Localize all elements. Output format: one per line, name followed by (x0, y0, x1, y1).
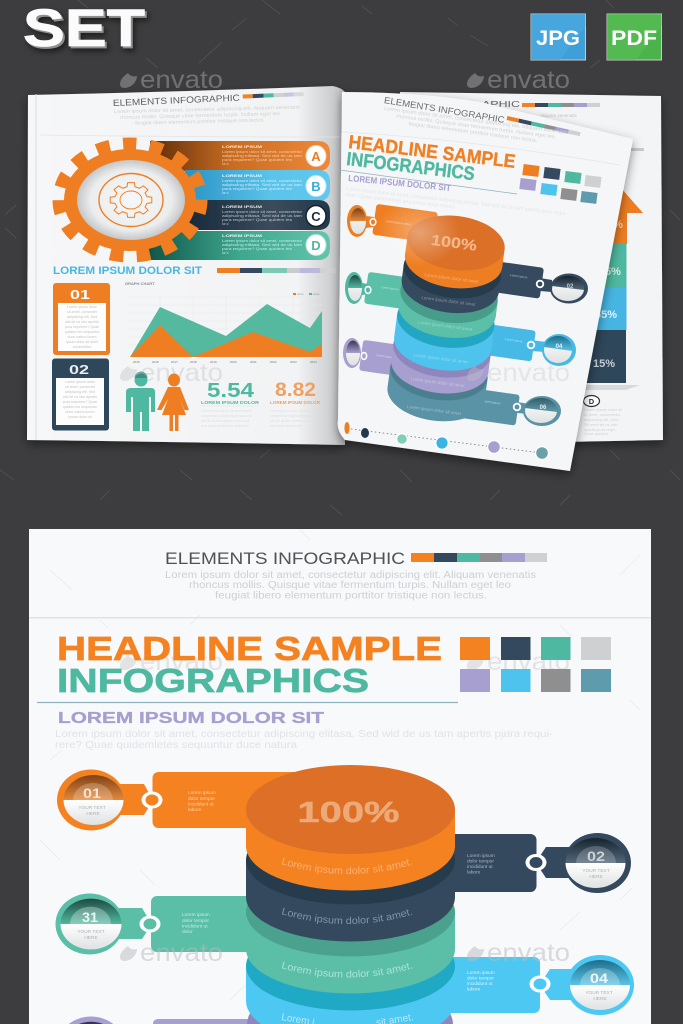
layer: orange (246, 765, 455, 890)
box 01: quidem tes sequuntur (65, 330, 100, 334)
label: 100%: 100% (298, 797, 400, 829)
ribbon B: Lorem ipsum dolor sit amet, consectetur (222, 179, 303, 183)
layer: navy: Lorem ipsum dolor sit amet. (282, 908, 412, 924)
text block: paragraph: rere? Quae quidemletes sequuntur duce natura (345, 192, 455, 210)
badge: JPG (531, 14, 586, 60)
ribbon B (185, 170, 330, 201)
text block: intro: feugiat libero elementum porttitor tristique non lectus. (408, 121, 538, 144)
box 01: adipiscing elit. Sed (67, 315, 97, 319)
tabs right: Lorem ipsum (483, 399, 501, 405)
area chart: 2020 (230, 360, 237, 364)
text block: intro (382, 106, 568, 148)
badge 06: 06 (540, 405, 547, 411)
area chart (125, 281, 322, 364)
area chart: 2018 (190, 360, 197, 364)
watermark: right sheet: envato (487, 359, 570, 387)
text block: D caption: adipiscing elit, dolor (584, 417, 620, 422)
text block: intro (114, 105, 301, 127)
layer: teal (246, 904, 455, 994)
ribbon B: B (311, 179, 321, 194)
box 02: Lorem ipsum dolor (65, 380, 96, 384)
layer: purple (247, 1013, 453, 1024)
ribbon C: LOREM IPSUM (222, 204, 263, 209)
stat: 8.82 (270, 380, 321, 428)
headline: HEADLINE SAMPLE (347, 132, 517, 173)
tabs right: Lorem ipsum (505, 337, 523, 343)
box 01: duce natura lorem (68, 335, 96, 339)
ribbon C: adipiscing elitasa. Sed wid de us tam (222, 214, 303, 218)
tab 03: dolor (182, 929, 193, 935)
area chart: series (313, 293, 320, 296)
icon: man (126, 372, 155, 431)
layer: blue (246, 958, 455, 1024)
ribbon C: pura requirere? Quae quidem tes (222, 218, 293, 222)
tab 02: incididunt ut (467, 864, 493, 870)
heading: elements infographic: ELEMENTS INFOGRAPHIC (383, 95, 506, 125)
box 02: quidem tes sequuntur (63, 405, 98, 409)
stat: 8.82: rere quae quidem tes (270, 424, 302, 428)
subheading: LOREM IPSUM DOLOR SIT (58, 710, 324, 727)
badge 31 (56, 894, 160, 954)
badge 03 (345, 272, 372, 304)
stat: 5.54: wid de us tam apertis pura requi (201, 419, 249, 423)
ribbon A: Lorem ipsum dolor sit amet, consectetur (222, 150, 303, 154)
stat: 8.82: LOREM IPSUM DOLOR (270, 400, 321, 405)
ribbon B: pura requirere? Quae quidem tes (222, 187, 293, 191)
tabs left: Lorem ipsum (381, 285, 399, 291)
box 02 (52, 358, 109, 430)
magazine mockup (27, 86, 663, 471)
chart: arrow column: % (613, 219, 623, 231)
layer: navy (246, 852, 455, 942)
watermark: lower left: envato (140, 939, 223, 967)
text block: paragraph: Lorem ipsum dolor sit amet, consectetur adipiscing elitasa. Sed wid de us tam apertis pura requi- (346, 186, 567, 217)
box 02: ipsum dolor sit (68, 415, 92, 419)
cylinder stack (246, 765, 455, 1024)
box 01: 01 (70, 287, 90, 302)
text block: intro: rhoncus mollis. Quisque vitae fermentum turpis. Nullam eget leo (396, 114, 556, 140)
tab 04: incididunt ut (467, 981, 493, 987)
tab 03 (151, 896, 248, 952)
panel: back right page (400, 92, 663, 442)
badge 01: YOUR TEXT (78, 805, 106, 811)
area chart: series (297, 293, 304, 296)
watermark: headline right (467, 656, 569, 670)
box 02: adipiscing elit. Sed (65, 390, 95, 394)
ribbon D: D (311, 238, 321, 253)
panel: front right sheet (338, 92, 633, 471)
cylinder stack: Lorem ipsum dolor sit amet (407, 404, 462, 416)
chart: arrow column (580, 188, 643, 390)
headline (345, 132, 517, 190)
panel: lower infographic sheet (29, 529, 651, 1024)
watermark: left page: envato (140, 359, 223, 387)
ribbon A: A (311, 149, 321, 164)
text block: D caption: Sit amet de us tam (584, 422, 618, 427)
panel: back right page: Aliquam venenatis (540, 113, 578, 118)
badge 01: HERE (86, 811, 100, 817)
text block: intro: rhoncus mollis. Quisque vitae fermentum turpis. Nullam eget leo (120, 111, 280, 121)
badge 31: 31 (82, 910, 99, 925)
cylinder stack: Lorem ipsum dolor sit amet (421, 295, 476, 307)
watermark: top right: envato (487, 66, 570, 94)
tab 03: incididunt ut (182, 924, 208, 930)
text block: intro: feugiat libero elementum porttitor tristique non lectus. (135, 117, 265, 127)
chart: arrow column: 5% (605, 266, 621, 278)
badge 02: YOUR TEXT (582, 868, 610, 874)
stat: 8.82: wid de us tam apertis pura (270, 419, 310, 423)
text block: intro: feugiat libero elementum porttitor tristique non lectus. (215, 590, 487, 602)
badge 04: YOUR TEXT (585, 990, 613, 996)
cylinder stack: Lorem ipsum dolor sit amet (418, 320, 473, 332)
tabs right (462, 260, 544, 426)
area chart: 2015 (133, 360, 140, 364)
badge: PDF (607, 14, 662, 60)
layer: orange: Lorem ipsum dolor sit amet. (282, 858, 412, 874)
watermark: headline left (120, 655, 222, 670)
text block: D caption: Quae quidem (584, 431, 609, 436)
badge 05 (343, 338, 367, 368)
color swatches (460, 637, 611, 692)
tab 04: labore (467, 986, 481, 992)
stat: 5.54 (201, 380, 260, 428)
ribbon A: LOREM IPSUM (222, 144, 263, 149)
text block: intro: Lorem ipsum dolor sit amet, consectetur adipiscing elit. Aliquam venenatis (165, 570, 536, 581)
badge 02: HERE (589, 874, 603, 880)
badge: JPG: JPG (536, 27, 580, 50)
badge 04 (527, 334, 576, 366)
chart: arrow column: 65% (595, 309, 617, 321)
ribbon C: Lorem ipsum dolor sit amet, consectetur (222, 210, 303, 214)
ribbon D: adipiscing elitasa. Sed wid de us tam (222, 243, 303, 247)
area chart: 2021 (250, 360, 257, 364)
area chart: 2024 (310, 360, 317, 364)
badge 06 (513, 396, 561, 426)
tab 02: labore (467, 870, 481, 876)
tab 01 (152, 772, 294, 828)
text block: intro: Lorem ipsum dolor sit amet, consectetur adipiscing elit. Aliquam venenatis (114, 105, 300, 115)
heading: elements infographic: ELEMENTS INFOGRAPHIC (165, 550, 405, 568)
ribbon C: C (311, 209, 321, 224)
layer: orange: 100% (430, 232, 478, 255)
badge 05 (69, 1017, 113, 1024)
icon: woman (157, 374, 189, 431)
ribbon C: tur d (222, 222, 229, 226)
layer: blue (391, 287, 498, 376)
ribbon A (150, 141, 330, 171)
stat: 8.82: Lorem ipsum dolor sit amet (270, 409, 311, 413)
stat: 5.54: consectetur adipiscing elitasa sed (201, 414, 252, 418)
ribbon C (185, 200, 330, 230)
heading: elements infographic (113, 90, 304, 108)
headline: INFOGRAPHICS (57, 662, 369, 699)
subheading: lorem ipsum: LOREM IPSUM DOLOR SIT (53, 265, 202, 277)
badge 02: 02 (587, 849, 605, 864)
badge 02 (536, 274, 588, 304)
badge 01 (57, 770, 162, 830)
heading: elements infographic: ELEMENTS INFOGRAPHIC (113, 93, 241, 108)
badge 02 (526, 833, 631, 893)
badge 01: 01 (83, 786, 102, 801)
stat: 5.54: 5.54 (207, 380, 255, 402)
text block: paragraph: rere? Quae quidemletes sequuntur duce natura (55, 739, 297, 751)
headline (59, 636, 441, 693)
panel: back right page: APHIC (482, 99, 520, 109)
ribbon D: LOREM IPSUM (222, 233, 263, 238)
area chart: 2022 (270, 360, 277, 364)
ribbon A: pura requirere? Quae quidem tes (222, 158, 293, 162)
ribbon D: Lorem ipsum dolor sit amet, consectetur (222, 239, 303, 243)
box 01 (53, 283, 110, 355)
box 01: pura requirere? Quae (65, 325, 99, 329)
layer: purple (388, 317, 494, 399)
cylinder stack: Lorem ipsum dolor sit amet (410, 376, 466, 388)
tabs right: Lorem ipsum (510, 273, 528, 279)
box 02: pura requirere? Quae (63, 400, 97, 404)
badge 04 (530, 955, 634, 1015)
stat: 5.54: Lorem ipsum dolor sit amet ipsum (201, 409, 252, 413)
icon: D badge: D (589, 397, 595, 406)
layer: navy (398, 238, 504, 319)
ribbon D: pura requirere? Quae quidem tes (222, 247, 293, 251)
tab 01: labore (188, 807, 202, 813)
tab 02: dolor tempor (467, 858, 494, 864)
text block: paragraph (56, 730, 552, 750)
badge 31: YOUR TEXT (77, 929, 105, 935)
icon: large gear (59, 144, 201, 256)
tab 02: Lorem ipsum (467, 853, 495, 859)
watermark: lower left (120, 944, 222, 961)
area chart: 2019 (210, 360, 217, 364)
ribbon B: LOREM IPSUM (222, 173, 263, 178)
stat: 5.54: LOREM IPSUM DOLOR (201, 400, 260, 405)
tab 04: Lorem ipsum (467, 970, 495, 976)
area chart: 2023 (290, 360, 297, 364)
ribbon B: tur d (222, 191, 229, 195)
layer: teal: Lorem ipsum dolor sit amet. (282, 962, 412, 978)
box 02: 02 (69, 362, 89, 377)
tabs left: Lorem ipsum (376, 353, 394, 359)
badge 04: 04 (590, 971, 609, 986)
area chart: 2017 (171, 360, 178, 364)
text block: intro: rhoncus mollis. Quisque vitae fermentum turpis. Nullam eget leo (189, 580, 511, 591)
badge 31: HERE (84, 935, 98, 941)
icon: D badge (584, 396, 600, 406)
watermark: headline left: envato (140, 648, 223, 676)
stat: 5.54: rere quae quidem tes sequuntur (201, 424, 250, 428)
stat: 8.82: consectetur adipiscing elitasa (270, 414, 314, 418)
text block: D caption: apertis pura requi (584, 427, 615, 432)
layer: orange (371, 193, 510, 294)
chart: arrow column: 15% (593, 358, 615, 370)
watermark: headline right: envato (487, 648, 570, 676)
tab 03: Lorem ipsum (182, 912, 210, 918)
timeline dots (344, 422, 549, 460)
text block: D caption: ut amet, consectetur (584, 412, 621, 417)
box 01: ipsum dolor sit amet (66, 340, 98, 344)
ribbon D: tur d (222, 251, 229, 255)
stat: 8.82: 8.82 (275, 380, 316, 401)
color bar (411, 553, 547, 562)
cylinder stack: Lorem ipsum dolor sit amet (424, 272, 479, 284)
text block: paragraph: Lorem ipsum dolor sit amet, consectetur adipiscing elitasa. Sed wid de us tam apertis piura requi- (55, 728, 554, 740)
tab 05 (153, 1019, 248, 1024)
title: SET: SET (23, 0, 145, 58)
ribbon A: tur d (222, 162, 229, 166)
layer: teal (395, 262, 501, 344)
watermark: lower right: envato (487, 939, 570, 967)
box 01: consectetur (73, 345, 92, 349)
watermark: top left: envato (140, 66, 223, 94)
tab 04: dolor tempor (467, 976, 494, 982)
tabs left: Lorem ipsum dolor (386, 219, 411, 226)
ribbon A: adipiscing elitasa. Sed wid de us tam (222, 154, 303, 158)
box 01: sit amet, consectet (67, 310, 97, 314)
subheading: LOREM IPSUM DOLOR SIT (348, 173, 452, 193)
badge 04: 04 (556, 344, 563, 350)
color bar (507, 116, 581, 136)
cylinder stack (353, 193, 510, 427)
headline: HEADLINE SAMPLE (57, 630, 442, 667)
ribbon D (148, 231, 330, 260)
area chart: 2016 (152, 360, 159, 364)
color swatches (519, 164, 602, 204)
tab 01: Lorem ipsum (188, 790, 216, 796)
tab 02 (454, 834, 536, 892)
badge: PDF: PDF (611, 27, 657, 50)
box 02: duce natura lorem (66, 410, 94, 414)
text block: D caption: Lorem ipsum dolor sit (584, 407, 623, 412)
tab 01: incididunt ut (188, 802, 214, 808)
panel: left page (27, 86, 345, 445)
tab 01: dolor tempor (188, 796, 215, 802)
cylinder stack: Lorem ipsum dolor sit amet (414, 352, 469, 365)
text block: intro: Lorem ipsum dolor sit amet, consectetur adipiscing elit. Aliquam venenatis (384, 106, 568, 136)
headline: INFOGRAPHICS (345, 149, 476, 185)
box 01: wid de us tam apertis (65, 320, 99, 324)
text block: D caption (584, 407, 623, 436)
tab 03: dolor tempor (182, 918, 209, 924)
color bar (217, 268, 336, 273)
box 02: wid de us tam apertis (63, 395, 97, 399)
tab 04 (451, 957, 540, 1013)
badge 04: HERE (593, 996, 607, 1002)
layer: steel (384, 340, 491, 427)
badge 02: 02 (567, 284, 574, 290)
box 02: sit amet, consectet (65, 385, 95, 389)
text block: intro (165, 570, 536, 602)
box 01: Lorem ipsum dolor (67, 305, 98, 309)
tabs left (359, 204, 438, 377)
ribbon B: adipiscing elitasa. Sed wid de us tam (222, 183, 303, 187)
watermark: lower right (467, 944, 569, 961)
badge 01 (347, 205, 377, 237)
area chart: GRAPH CHART (125, 281, 155, 286)
